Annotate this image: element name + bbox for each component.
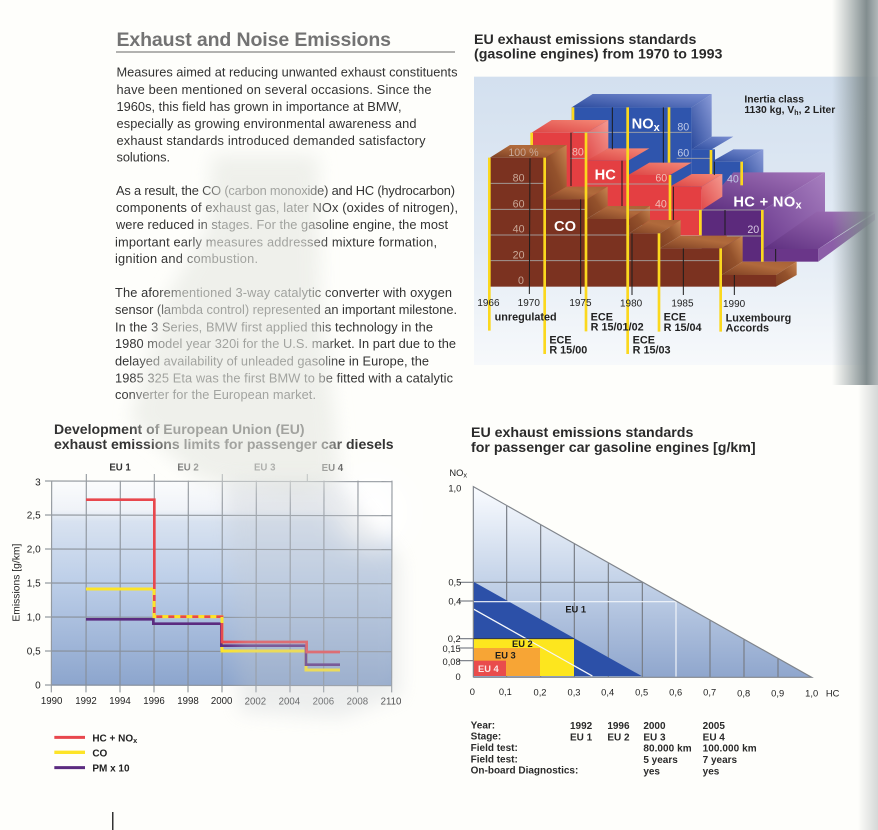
x axis labels: 0,3 bbox=[568, 687, 580, 697]
standards table: Field test: bbox=[471, 743, 518, 754]
paragraph 1: Measures aimed at reducing unwanted exhaust constituents bbox=[116, 65, 458, 80]
block labels: x bbox=[796, 200, 803, 212]
standards table: 80.000 km bbox=[643, 744, 692, 755]
x axis labels: 1996 bbox=[143, 696, 165, 707]
x axis labels: 0 bbox=[470, 687, 475, 697]
period labels: EU 4 bbox=[322, 463, 344, 474]
x axis labels: 1998 bbox=[177, 696, 199, 707]
paragraph 3: 1980 model year 320i for the U.S. market. In part due to the bbox=[115, 336, 456, 351]
regulation labels bbox=[495, 311, 791, 357]
regulation labels: Luxembourg bbox=[726, 312, 791, 324]
scale labels: 80 bbox=[513, 173, 525, 185]
regulation labels: R 15/01/02 bbox=[591, 322, 644, 334]
paragraph 1: especially as growing environmental awareness and bbox=[116, 116, 416, 131]
standards table: EU 1 bbox=[570, 732, 593, 743]
plot area bbox=[52, 481, 392, 686]
year axis labels: 1970 bbox=[518, 298, 540, 309]
stage labels: EU 2 bbox=[512, 639, 533, 649]
x axis labels: 2000 bbox=[211, 696, 232, 707]
standards table: Stage: bbox=[471, 732, 501, 743]
year axis labels: 1975 bbox=[569, 298, 592, 309]
year axis labels: 1985 bbox=[671, 298, 694, 309]
regulation labels: ECE bbox=[591, 311, 613, 323]
paragraph 2 bbox=[115, 183, 458, 266]
heading: 3D chart title: EU exhaust emissions standards bbox=[474, 32, 696, 48]
regulation labels: unregulated bbox=[495, 311, 557, 323]
standards table: EU 2 bbox=[607, 732, 630, 743]
x axis labels: 1994 bbox=[109, 696, 131, 707]
y axis labels: 0,5 bbox=[448, 578, 461, 588]
legend: PM x 10 bbox=[92, 764, 130, 775]
x axis labels bbox=[41, 696, 401, 708]
standards table: yes bbox=[703, 766, 720, 777]
legend: CO bbox=[92, 748, 108, 759]
heading: 3D chart title: (gasoline engines) from 1970 to 1993 bbox=[474, 46, 722, 62]
scale labels: 60 bbox=[513, 198, 525, 210]
paragraph 1: have been mentioned on several occasions. Since the bbox=[116, 82, 432, 97]
scale labels: 80 bbox=[572, 146, 584, 158]
y axis title: Emissions [g/km] bbox=[12, 543, 23, 622]
paragraph 3: 1985 325 Eta was the first BMW to be fitted with a catalytic bbox=[115, 371, 454, 386]
dashed CO overlay bbox=[154, 589, 222, 628]
y axis labels: 0 bbox=[455, 672, 461, 682]
year axis labels: 1980 bbox=[620, 298, 643, 309]
paragraph 1: solutions. bbox=[116, 150, 170, 165]
standards table: 100.000 km bbox=[703, 744, 757, 755]
block labels: HC bbox=[595, 168, 616, 184]
x axis labels: 1,0 bbox=[805, 688, 818, 698]
y axis labels: 2,0 bbox=[27, 545, 41, 556]
EU 2 blue band bbox=[473, 582, 642, 676]
x axis labels: 0,7 bbox=[703, 688, 716, 698]
scale labels: 60 bbox=[655, 172, 667, 184]
paragraph 2: were reduced in stages. For the gasoline engine, the most bbox=[115, 217, 448, 232]
standards table: Field test: bbox=[471, 754, 518, 765]
heading: diesel chart title: Development of European Union (EU) bbox=[54, 421, 305, 437]
EU 3 orange zone bbox=[473, 648, 540, 676]
scale labels: 40 bbox=[727, 173, 739, 185]
paragraph 2: As a result, the CO (carbon monoxide) and HC (hydrocarbon) bbox=[116, 183, 455, 198]
series: HC + NOx bbox=[86, 500, 340, 652]
scale labels: 20 bbox=[747, 224, 759, 236]
x axis labels: 1992 bbox=[75, 696, 97, 707]
standards table: On-board Diagnostics: bbox=[471, 766, 578, 777]
standards table: 2000 bbox=[643, 721, 666, 732]
NOx axis title: NO bbox=[449, 468, 463, 478]
x axis labels: 2008 bbox=[347, 697, 368, 708]
standards table: 5 years bbox=[643, 755, 678, 766]
regulation labels: Accords bbox=[726, 323, 769, 335]
x axis labels: 0,9 bbox=[771, 689, 784, 699]
EU 2 yellow zone bbox=[473, 639, 574, 676]
x axis labels: 0,2 bbox=[534, 687, 546, 697]
y axis labels: 0,2 bbox=[448, 634, 461, 644]
standards table: 1996 bbox=[607, 721, 630, 732]
y axis labels bbox=[27, 477, 41, 692]
inertia class note: h bbox=[794, 110, 799, 117]
article text column bbox=[115, 29, 458, 402]
x axis labels: 2002 bbox=[245, 696, 266, 707]
regulation labels: R 15/03 bbox=[633, 345, 671, 357]
stage labels: EU 4 bbox=[478, 664, 500, 674]
scale labels: 40 bbox=[513, 224, 525, 236]
x axis labels: HC bbox=[826, 688, 840, 698]
paragraph 2: important early measures addressed mixture formation, bbox=[115, 235, 437, 250]
year axis labels bbox=[477, 298, 746, 310]
standards table: Year: bbox=[471, 720, 495, 731]
block labels bbox=[554, 117, 803, 235]
panel: 3D stepped emissions chart bbox=[474, 77, 878, 365]
NOx axis title: x bbox=[463, 471, 467, 480]
y axis labels: 1,0 bbox=[27, 613, 41, 624]
y axis labels bbox=[443, 484, 461, 682]
x axis labels: 0,8 bbox=[737, 688, 750, 698]
legend: x bbox=[133, 736, 138, 745]
paragraph 3: The aforementioned 3-way catalytic converter with oxygen bbox=[115, 285, 452, 300]
y axis labels: 0,15 bbox=[443, 644, 461, 654]
y axis labels: 2,5 bbox=[27, 511, 41, 522]
stage labels bbox=[478, 604, 586, 674]
x axis labels: 0,5 bbox=[635, 688, 648, 698]
series: PM x 10 bbox=[86, 619, 340, 665]
standards table: 1992 bbox=[570, 721, 593, 732]
y axis labels: 1,5 bbox=[27, 579, 41, 590]
stage labels: EU 1 bbox=[565, 604, 586, 614]
standards table: 7 years bbox=[703, 755, 738, 766]
HC + NOx blocks bbox=[702, 172, 875, 262]
y axis labels: 0,08 bbox=[443, 657, 461, 667]
x axis labels: 2006 bbox=[313, 697, 334, 708]
triangle outline bbox=[473, 487, 812, 677]
white EU 1 limit lines bbox=[473, 602, 676, 677]
x axis labels: 0,6 bbox=[669, 688, 682, 698]
paragraph 3: sensor (lambda control) represented an important milestone. bbox=[115, 302, 457, 317]
NOx blocks bbox=[572, 94, 763, 207]
triangle area bbox=[473, 487, 812, 677]
scale labels: 60 bbox=[677, 147, 689, 159]
series: CO bbox=[86, 589, 340, 670]
heading: gasoline standards title: EU exhaust emissions standards bbox=[471, 425, 693, 441]
y axis labels: 3 bbox=[35, 477, 41, 488]
block labels: x bbox=[654, 122, 661, 134]
scale labels: 0 bbox=[518, 275, 524, 287]
EU 4 red zone bbox=[473, 661, 506, 676]
regulation labels: ECE bbox=[549, 334, 572, 346]
inertia class note: , 2 Liter bbox=[799, 105, 835, 116]
scale labels bbox=[508, 122, 759, 287]
legend: HC + NO bbox=[92, 733, 133, 744]
y axis labels: 0 bbox=[35, 681, 41, 692]
x axis labels: 0,4 bbox=[601, 687, 614, 697]
standards table: EU 3 bbox=[643, 733, 666, 744]
year axis labels: 1990 bbox=[723, 299, 746, 310]
page gutter shadow bbox=[832, 0, 878, 830]
paragraph 2: components of exhaust gas, later NOx (oxides of nitrogen), bbox=[116, 200, 458, 215]
x axis labels: 2004 bbox=[279, 696, 301, 707]
standards table: yes bbox=[643, 766, 660, 777]
block labels: HC + NO bbox=[733, 194, 795, 210]
x axis labels bbox=[470, 687, 840, 699]
stage labels: EU 3 bbox=[495, 650, 516, 660]
heading: diesel chart title: exhaust emissions limits for passenger car diesels bbox=[54, 436, 394, 452]
standards table: 2005 bbox=[703, 721, 725, 732]
block labels: NO bbox=[632, 117, 654, 133]
x axis labels: 0,1 bbox=[499, 687, 512, 697]
y axis labels: 0,5 bbox=[27, 646, 41, 657]
block labels: CO bbox=[554, 219, 576, 235]
scale labels: 40 bbox=[655, 198, 667, 210]
period labels: EU 2 bbox=[177, 463, 199, 474]
period labels bbox=[109, 462, 344, 474]
standards table: EU 4 bbox=[703, 733, 725, 744]
paragraph 3: delayed availability of unleaded gasoline in Europe, the bbox=[115, 354, 429, 369]
inertia class note: Inertia class bbox=[744, 94, 804, 105]
regulation labels: R 15/04 bbox=[664, 322, 702, 334]
regulation labels: ECE bbox=[664, 312, 686, 324]
standards table bbox=[471, 720, 757, 777]
regulation labels: ECE bbox=[633, 334, 655, 346]
legend bbox=[54, 733, 138, 775]
heading: gasoline standards title: for passenger car gasoline engines [g/km] bbox=[471, 440, 756, 456]
paragraph 1: 1960s, this field has grown in importance at BMW, bbox=[116, 99, 402, 114]
pale page stain over text and chart bbox=[130, 155, 400, 718]
paragraph 3: converter for the European market. bbox=[115, 387, 316, 402]
paragraph 3: In the 3 Series, BMW first applied this technology in the bbox=[115, 320, 433, 335]
inertia class note: 1130 kg, V bbox=[744, 105, 794, 116]
HC blocks bbox=[532, 120, 722, 235]
paragraph 1: exhaust standards introduced demanded satisfactory bbox=[116, 133, 426, 148]
paragraph 1 bbox=[116, 65, 458, 165]
x axis labels: 1990 bbox=[41, 696, 62, 707]
period labels: EU 1 bbox=[109, 462, 131, 473]
scale labels: 80 bbox=[677, 122, 689, 134]
chart: diesel emission limits line chart bbox=[12, 462, 410, 775]
y axis labels: 1,0 bbox=[448, 484, 461, 494]
y axis labels: 0,4 bbox=[448, 596, 461, 606]
regulation labels: R 15/00 bbox=[549, 345, 587, 357]
scale labels: 20 bbox=[513, 249, 525, 261]
scale labels: 100 % bbox=[508, 147, 539, 159]
heading: Exhaust and Noise Emissions: Exhaust and Noise Emissions bbox=[116, 29, 391, 51]
paragraph 3 bbox=[115, 285, 457, 402]
chart: gasoline limits triangle diagram bbox=[443, 468, 840, 777]
year axis labels: 1966 bbox=[477, 298, 500, 309]
x axis labels: 2110 bbox=[381, 697, 401, 708]
small crop tick at bottom bbox=[112, 812, 114, 830]
period labels: EU 3 bbox=[254, 463, 276, 474]
paragraph 2: ignition and combustion. bbox=[115, 251, 258, 266]
CO blocks bbox=[490, 145, 797, 287]
